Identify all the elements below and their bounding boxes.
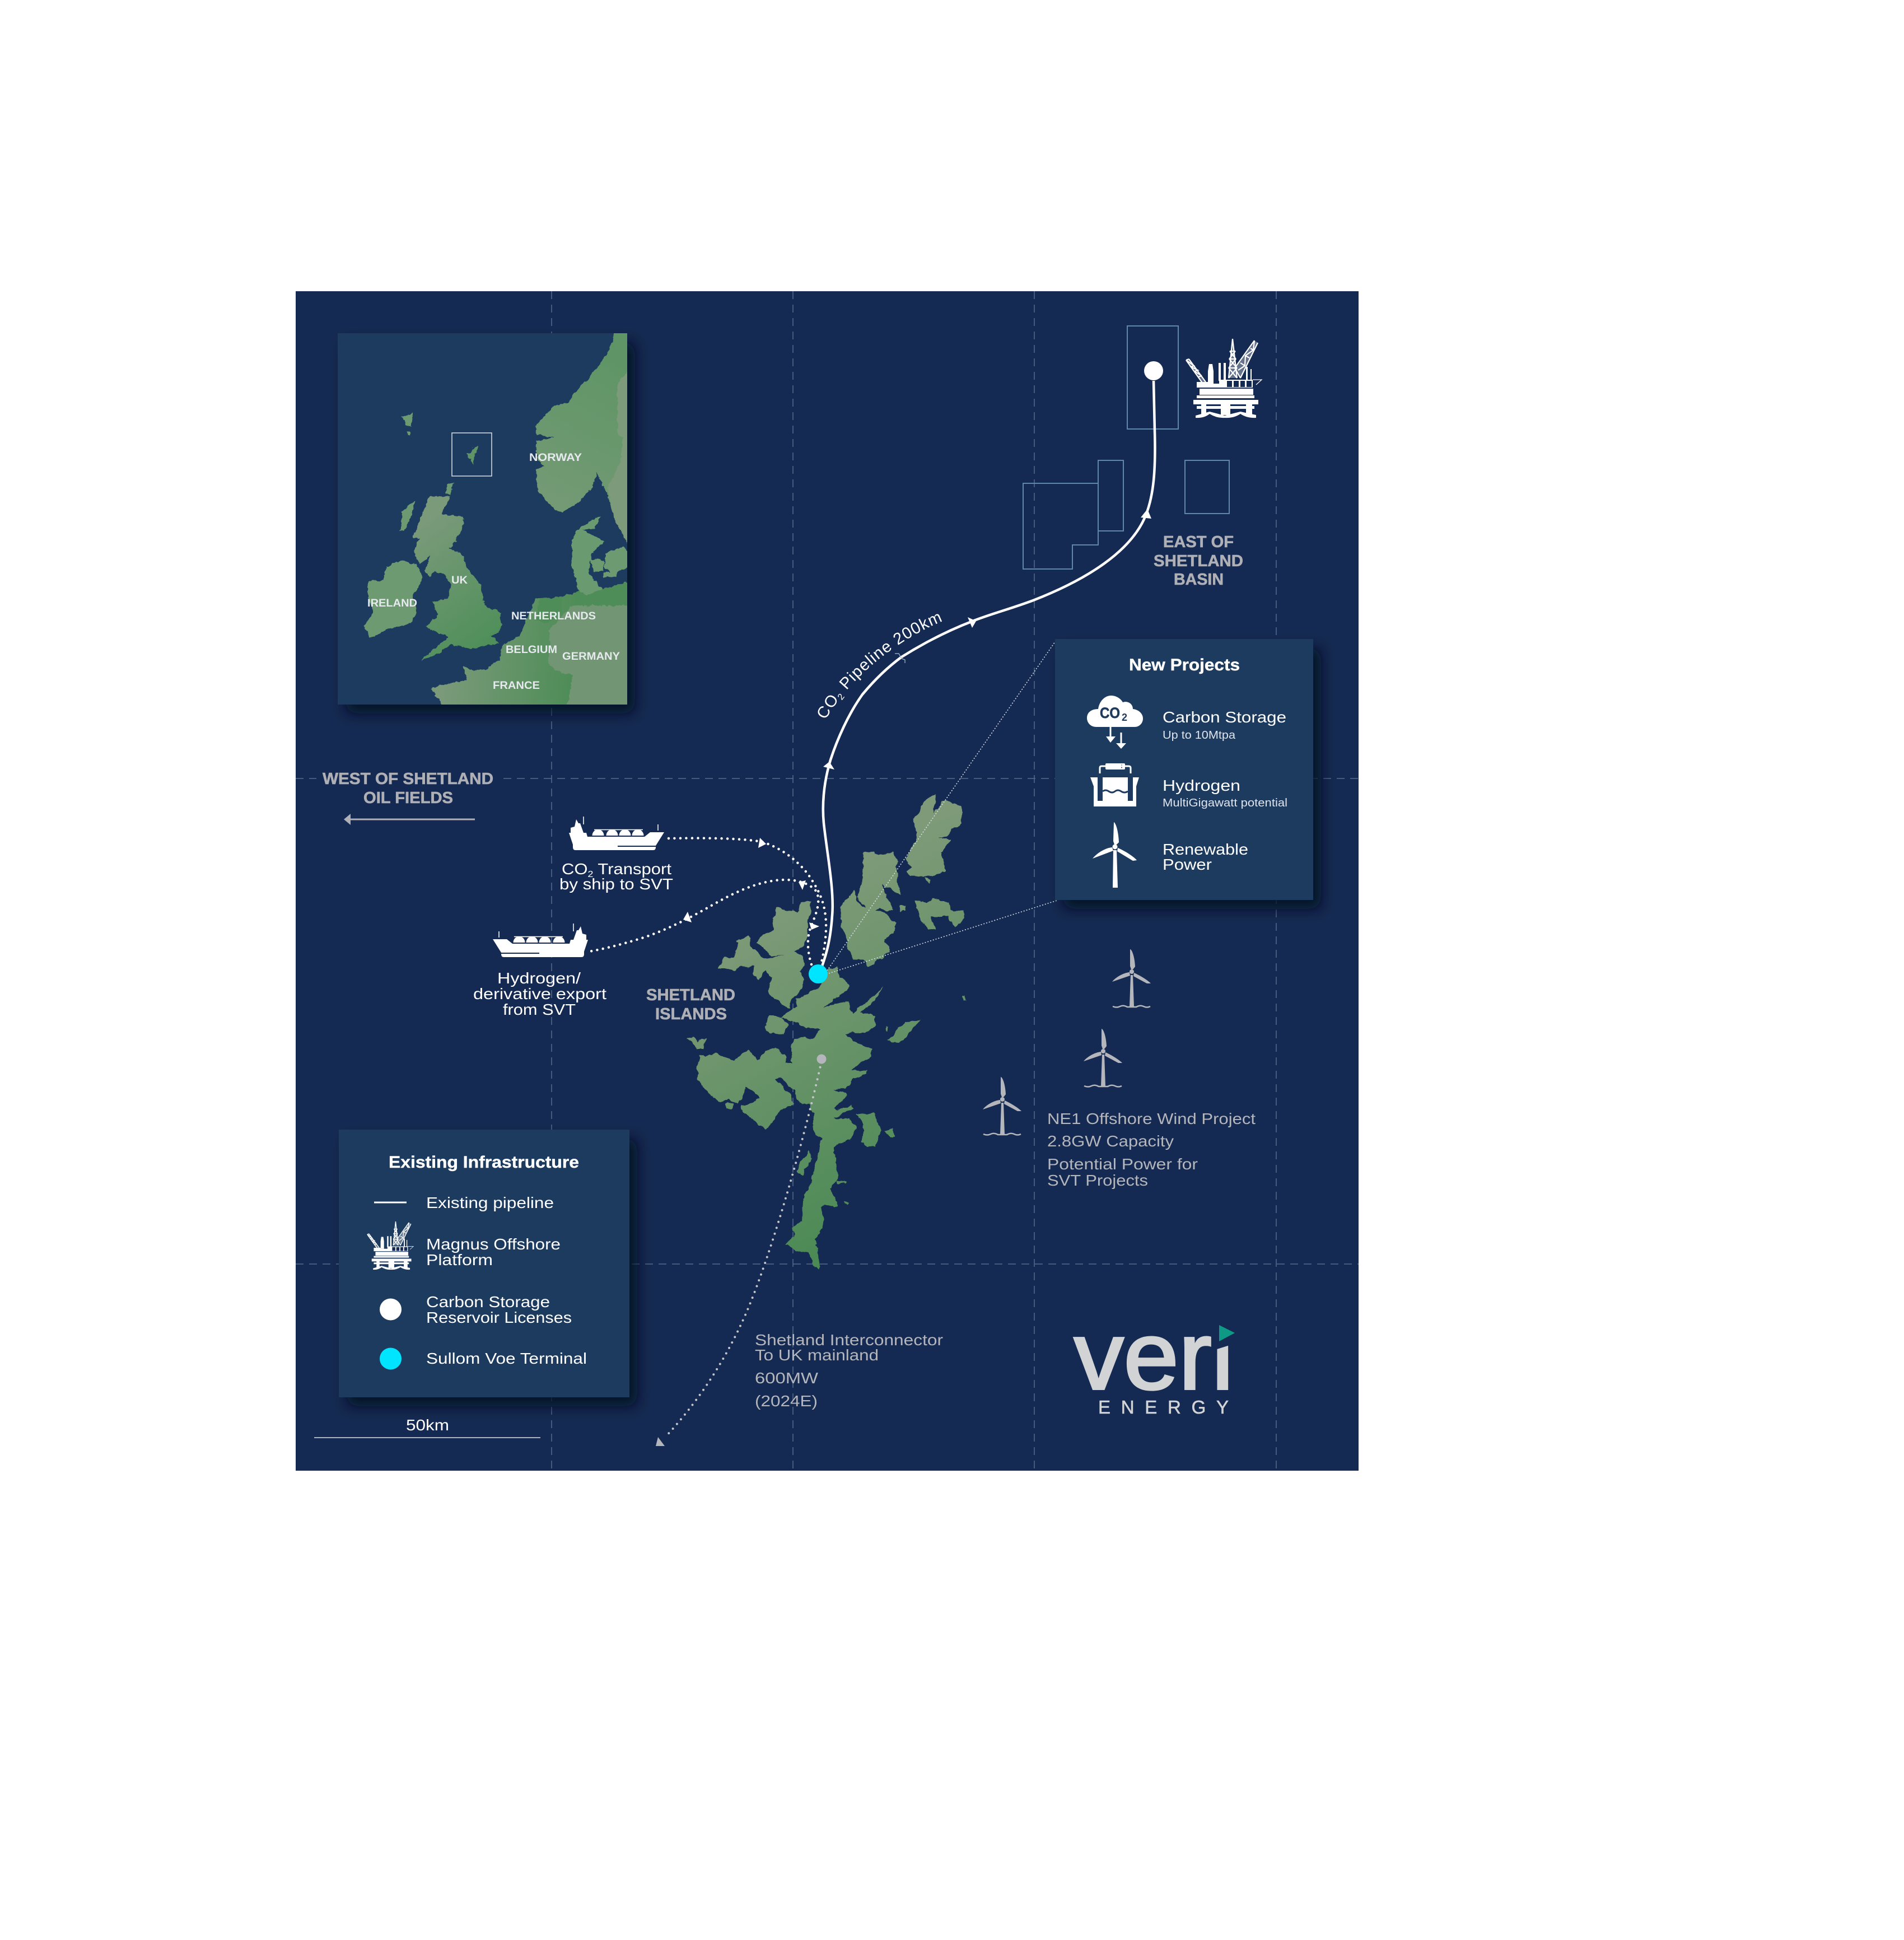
legend: pipeline text: Existing pipeline [426,1194,554,1211]
heading: east of Shetland basin: BASIN [1174,571,1224,589]
inset landmasses [364,327,636,713]
heading: west of Shetland oil fields: OIL FIELDS [363,789,453,807]
interconnector text: 600MW [755,1369,819,1387]
reservoir marker [1144,361,1163,380]
hydrogen ship route [589,880,819,964]
country labels: GERMANY [562,651,620,663]
hydrogen export label: derivative export [473,985,606,1002]
heading: east of Shetland basin [1154,533,1243,589]
country labels [367,452,620,692]
NE1 wind project text: NE1 Offshore Wind Project [1047,1110,1256,1127]
licence blocks [1023,326,1229,569]
text: CO [818,696,837,718]
panel: existing infrastructure [339,1130,629,1397]
icon: hydrogen ship [493,924,588,957]
legend: terminal text: Sullom Voe Terminal [426,1350,587,1367]
hydrogen export label: from SVT [503,1001,576,1018]
Shetland Islands map [687,795,967,1269]
legend heading: Existing Infrastructure [389,1153,579,1172]
panel heading: New Projects [1129,656,1240,674]
legend: pipeline line [374,1202,407,1203]
marker: Sullom Voe Terminal [809,964,828,983]
legend: reservoir text: Reservoir Licenses [426,1309,572,1326]
NE1 wind project text: SVT Projects [1047,1172,1148,1189]
carbon storage text: Up to 10Mtpa [1163,729,1236,742]
connector lines to new projects panel [827,642,1057,973]
CO2 transport label: CO [562,860,585,878]
country labels: UK [451,575,468,586]
NE1 wind project text: 2.8GW Capacity [1047,1132,1174,1150]
country labels: FRANCE [493,680,540,692]
icon: CO2 cloud [1087,696,1143,749]
hydrogen export label: Hydrogen/ [497,969,581,987]
carbon storage text: Carbon Storage [1163,708,1286,726]
interconnector route [656,1061,822,1446]
marker: interconnector landfall [816,1054,827,1064]
interconnector text: (2024E) [755,1392,818,1410]
icon: CO2 cloud: CO [1100,705,1120,721]
legend: platform text: Magnus Offshore [426,1235,561,1253]
country labels: BELGIUM [506,644,557,656]
logo: veri energy: ENERGY [1098,1397,1229,1417]
legend: reservoir marker [380,1298,402,1321]
text: Pipeline 200km [839,614,942,689]
carbon storage text [1163,708,1286,742]
icon: wind turbine [1093,822,1137,888]
NE1 wind project text: Potential Power for [1047,1155,1198,1173]
NE1 wind project text [1047,1110,1256,1189]
wind turbines [983,949,1151,1135]
panel: new projects [1055,639,1313,900]
CO2 transport label: Transport [593,860,671,878]
grid lines [296,291,1359,1471]
locator box [452,433,492,476]
legend: reservoir text [426,1293,572,1326]
renewable text: Renewable [1163,841,1248,858]
panel: inset location map [338,327,636,713]
heading: east of Shetland basin: EAST OF [1163,533,1234,551]
hydrogen text [1163,777,1287,809]
heading: Shetland Islands: SHETLAND [646,986,735,1004]
renewable text [1163,841,1248,873]
interconnector text: Shetland Interconnector [755,1331,943,1349]
heading: east of Shetland basin: SHETLAND [1154,552,1243,570]
hydrogen text: Hydrogen [1163,777,1240,794]
CO2 transport label: 2 [588,870,593,879]
heading: west of Shetland oil fields: WEST OF SHETLAND [323,770,493,788]
legend: terminal marker [380,1347,402,1370]
icon: CO2 cloud: 2 [1122,712,1127,723]
map background [296,291,1359,1471]
logo: veri energy: veri [1074,1302,1234,1410]
legend: platform text: Platform [426,1251,493,1269]
country labels: NORWAY [529,452,582,464]
CO2 ship route [669,838,826,964]
legend: platform icon [367,1221,413,1270]
CO2 transport label line 2: by ship to SVT [559,875,673,893]
heading: Shetland Islands [646,986,735,1023]
icon: hydrogen electrolyser [1090,763,1139,806]
pipeline label [825,621,944,720]
country labels: NETHERLANDS [511,610,596,622]
heading: west of Shetland oil fields [323,770,493,825]
CO2 pipeline [822,381,1155,966]
text: 2 [838,693,844,700]
renewable text: Power [1163,856,1212,873]
legend: reservoir text: Carbon Storage [426,1293,550,1311]
hydrogen text: MultiGigawatt potential [1163,797,1287,809]
icon: CO2 ship [569,817,664,850]
legend: platform text [426,1235,561,1269]
country labels: IRELAND [367,598,417,609]
hydrogen export label [473,969,606,1018]
scale bar: 50km [406,1416,449,1434]
heading: Shetland Islands: ISLANDS [655,1005,727,1023]
icon: offshore platform [1186,339,1262,418]
interconnector text [755,1331,943,1410]
interconnector text: To UK mainland [755,1346,879,1364]
